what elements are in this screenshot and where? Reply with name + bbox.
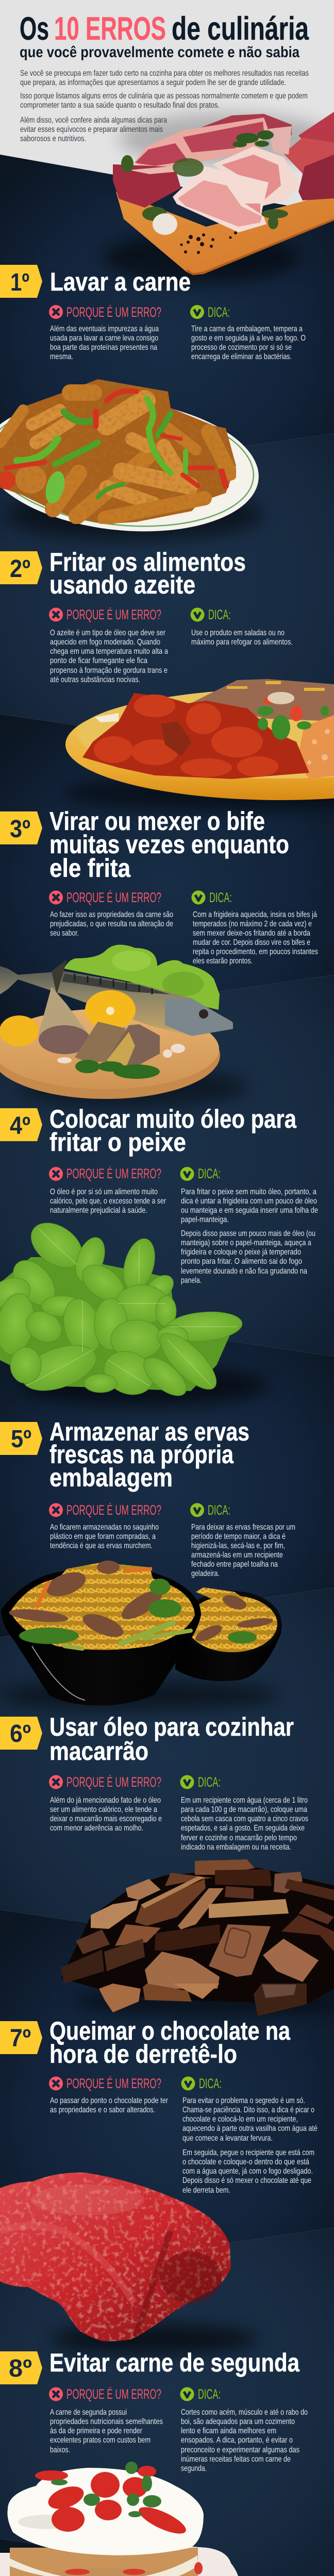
error text (50, 2408, 163, 2454)
error text: A carne de segunda possui (50, 2408, 127, 2417)
error text (50, 910, 173, 938)
error text: tendência é que as ervas murchem. (50, 1541, 153, 1550)
intro text (20, 69, 309, 143)
error label (49, 2386, 161, 2402)
error label: PORQUE É UM ERRO? (66, 2076, 161, 2091)
error label: PORQUE É UM ERRO? (66, 1502, 161, 1518)
tip label: DICA: (199, 2076, 222, 2091)
image: noodle bowls (0, 1561, 282, 1710)
error text: com menor aderência ao molho. (50, 1824, 143, 1833)
number badge 4: 4º (10, 1112, 30, 1140)
image: fried chicken plate (0, 379, 265, 544)
error label (49, 1166, 161, 1181)
tip text: período de tempo maior, a dica é (191, 1532, 286, 1541)
tip label (180, 2386, 221, 2402)
heading 2: usando azeite (49, 570, 195, 599)
error text: baixos. (50, 2446, 70, 2454)
error text: chega em uma temperatura muito alta a (50, 647, 168, 656)
heading: main title: Os (20, 11, 49, 47)
error text: boa parte das proteínas presentes na (50, 343, 157, 352)
error text: propenso à formação de gordura trans e (50, 666, 168, 675)
error label (49, 2076, 161, 2091)
error text: ser um alimento calórico, ele tende a (50, 1805, 157, 1814)
intro text: saborosos e nutritivos. (20, 134, 86, 143)
section 6 (0, 1713, 308, 1852)
error text (50, 2096, 169, 2114)
tip text: lento e ficam ainda melhores em (181, 2427, 276, 2435)
number badge 7 (0, 2021, 42, 2054)
tip label (181, 2076, 222, 2091)
image: smoked fish on wooden board (0, 945, 247, 1108)
heading: main title: 10 ERROS (54, 11, 166, 47)
tip text: Tire a carne da embalagem, tempera a (191, 325, 303, 333)
error text (50, 325, 159, 361)
heading 5: Armazenar as ervas (49, 1417, 249, 1446)
number badge 1 (0, 265, 42, 298)
section 3 (0, 807, 318, 965)
number badge 8 (0, 2351, 42, 2384)
error text (50, 629, 168, 684)
heading 5: embalagem (49, 1463, 173, 1492)
heading 7: Queimar o chocolate na (49, 2016, 291, 2045)
error text (50, 1796, 162, 1833)
tip text: ensopados. A dica, portanto, é evitar o (181, 2436, 293, 2445)
error label: PORQUE É UM ERRO? (66, 607, 161, 622)
tip text: Para deixar as ervas frescas por um (191, 1523, 295, 1532)
tip text: Use o produto em saladas ou no (191, 629, 285, 637)
image: raw beef cut (0, 2173, 258, 2354)
tip label (192, 890, 232, 905)
error label (49, 1502, 161, 1518)
error label (49, 304, 161, 320)
error label: PORQUE É UM ERRO? (66, 2386, 161, 2402)
heading 1: Lavar a carne (50, 267, 191, 296)
number badge 2: 2º (10, 555, 30, 583)
tip text: inúmeras receitas feitas com carne de (181, 2455, 291, 2464)
heading 3: Virar ou mexer o bife (49, 807, 265, 836)
error text: propriedades nutricionais semelhantes (50, 2417, 163, 2426)
heading 3: muitas vezes enquanto (49, 830, 289, 859)
heading: main title (20, 11, 309, 47)
heading 3 (49, 807, 289, 883)
image: pile of chocolate (61, 1859, 334, 2017)
tip text: higienizá-las, secá-las e, por fim, (191, 1541, 285, 1550)
error text: O azeite é um tipo de óleo que deve ser (50, 629, 166, 637)
number badge 3 (0, 811, 42, 844)
section 5 (0, 1417, 295, 1578)
tip label (190, 304, 230, 320)
error text: seu sabor. (50, 929, 79, 938)
error text: naturalmente prejudicial à saúde. (50, 1206, 147, 1215)
error text: ponto de ficar fumegante ele fica (50, 656, 147, 665)
heading 6: Usar óleo para cozinhar (49, 1713, 294, 1741)
tip text (182, 2096, 318, 2195)
error text: Além das eventuais impurezas a água (50, 325, 159, 333)
number badge 6: 6º (10, 1720, 31, 1748)
error text: Além do já mencionado fato de o óleo (50, 1796, 161, 1805)
section 1 (0, 265, 306, 361)
tip text (191, 629, 293, 647)
section 4 (0, 1105, 318, 1285)
tip label: DICA: (209, 890, 232, 905)
error text (50, 1523, 159, 1550)
section 7 (0, 2016, 318, 2195)
heading 5: frescas na própria (49, 1440, 234, 1469)
heading 2 (49, 548, 246, 599)
tip text: panela. (181, 1276, 202, 1285)
number badge 4 (0, 1108, 42, 1141)
error label (49, 607, 161, 622)
heading 7 (49, 2016, 291, 2069)
intro text: comprometer tanto a sua saúde quanto o resultado final dos pratos. (20, 101, 220, 110)
tip text (181, 1188, 318, 1285)
tip text: gosto e em seguida já a leve ao fogo. O (191, 334, 306, 343)
error text: Ao fazer isso as propriedades da carne são (50, 910, 173, 919)
tip text: pronto para fritar. O alimento sai do fogo (181, 1257, 302, 1266)
tip label (191, 607, 231, 622)
error text: usada para lavar a carne leva consigo (50, 334, 158, 343)
tip text: chocolate e colocá-lo em um recipiente, (182, 2115, 298, 2124)
number badge 7: 7º (10, 2025, 31, 2052)
tip label: DICA: (198, 1774, 221, 1790)
image: raw meat on cutting board (103, 112, 334, 283)
error text: prejudicadas, o que resulta na alteração de (50, 920, 173, 928)
error label: PORQUE É UM ERRO? (66, 304, 161, 320)
tip text: ele derreta bem. (182, 2186, 230, 2195)
heading 5 (49, 1417, 249, 1492)
number badge 6 (0, 1717, 42, 1750)
section 8 (0, 2348, 308, 2473)
error text: às da de primeira e pode render (50, 2427, 143, 2435)
number badge 3: 3º (10, 816, 30, 843)
tip text: levemente dourado e não fica grudando na (181, 1267, 307, 1276)
number badge 5 (0, 1422, 42, 1455)
heading 6 (49, 1713, 294, 1766)
tip label: DICA: (198, 2386, 221, 2402)
tip text: boi, são adequados para um cozimento (181, 2417, 295, 2426)
error text: calórico, pelo que, o excesso tende a ser (50, 1197, 166, 1206)
tip label: DICA: (208, 607, 231, 622)
tip text: encarrega de eliminar as bactérias. (191, 352, 292, 361)
error text: excelentes pratos com custos bem (50, 2436, 151, 2445)
error text: até outras substâncias nocivas. (50, 675, 140, 684)
tip label: DICA: (198, 1166, 221, 1181)
tip text: geladeira. (191, 1569, 220, 1578)
section 2 (0, 548, 293, 684)
tip text (191, 1523, 295, 1578)
tip text: indicado na embalagem ou na receita. (181, 1843, 291, 1852)
tip label (190, 1502, 230, 1518)
error label: PORQUE É UM ERRO? (66, 1774, 161, 1790)
intro text: evitar esses equívocos e preparar alimentos mais (20, 125, 163, 134)
error text: plástico em que foram compradas, a (50, 1532, 156, 1541)
number badge 5: 5º (11, 1426, 31, 1453)
tip label: DICA: (208, 304, 230, 320)
heading 2: Fritar os alimentos (49, 548, 246, 577)
image: red stew plate (62, 679, 334, 811)
number badge 8: 8º (9, 2355, 32, 2382)
intro text: Além disso, você confere ainda algumas dicas para (20, 116, 167, 125)
tip text: ferver e cozinhe o macarrão pelo tempo (181, 1834, 297, 1842)
tip text: armazená-las em um recipiente (191, 1551, 283, 1560)
heading 7: hora de derretê-lo (49, 2040, 237, 2069)
heading 4: fritar o peixe (49, 1128, 186, 1157)
number badge 1: 1º (10, 269, 29, 296)
tip label (180, 1166, 221, 1181)
tip text: fechado entre papel toalha na (191, 1560, 278, 1569)
error text: O óleo é por si só um alimento muito (50, 1188, 158, 1196)
heading 4 (49, 1105, 297, 1157)
image: basil leaves (0, 1214, 268, 1406)
tip text (181, 1796, 308, 1852)
tip label (180, 1774, 221, 1790)
tip text: preconceito e experimentar algumas das (181, 2446, 299, 2454)
error text (50, 1188, 166, 1215)
heading 6: macarrão (49, 1737, 148, 1766)
heading 3: ele frita (49, 854, 131, 883)
tip text: papel-manteiga. (181, 1215, 229, 1224)
tip text (181, 2408, 308, 2473)
error text: aquecido em fogo moderado. Quando (50, 638, 160, 647)
error text: as propriedades e o sabor alterados. (50, 2106, 155, 2114)
tip text: frigideira e coloque o peixe já temperado (181, 1248, 301, 1257)
tip label: DICA: (208, 1502, 230, 1518)
tip text: segunda. (181, 2464, 207, 2473)
error text: deixar o macarrão mais escorregadio e (50, 1815, 162, 1823)
error text: Ao passar do ponto o chocolate pode ter (50, 2096, 169, 2105)
tip text: eles estarão prontos. (193, 957, 253, 965)
error label: PORQUE É UM ERRO? (66, 1166, 161, 1181)
tip text (193, 910, 318, 965)
image: strawberry cream cake (0, 2462, 242, 2576)
error text: mesma. (50, 352, 73, 361)
error label (49, 890, 161, 905)
number badge 2 (0, 551, 42, 584)
tip text (191, 325, 306, 361)
error text: Ao ficarem armazenadas no saquinho (50, 1523, 159, 1532)
tip text: processo de cozimento por si só se (191, 343, 292, 352)
tip text: máximo para refogar os alimentos. (191, 638, 293, 647)
error label: PORQUE É UM ERRO? (66, 890, 161, 905)
error label (49, 1774, 161, 1790)
tip text: que comece a levantar fervura. (182, 2134, 273, 2143)
